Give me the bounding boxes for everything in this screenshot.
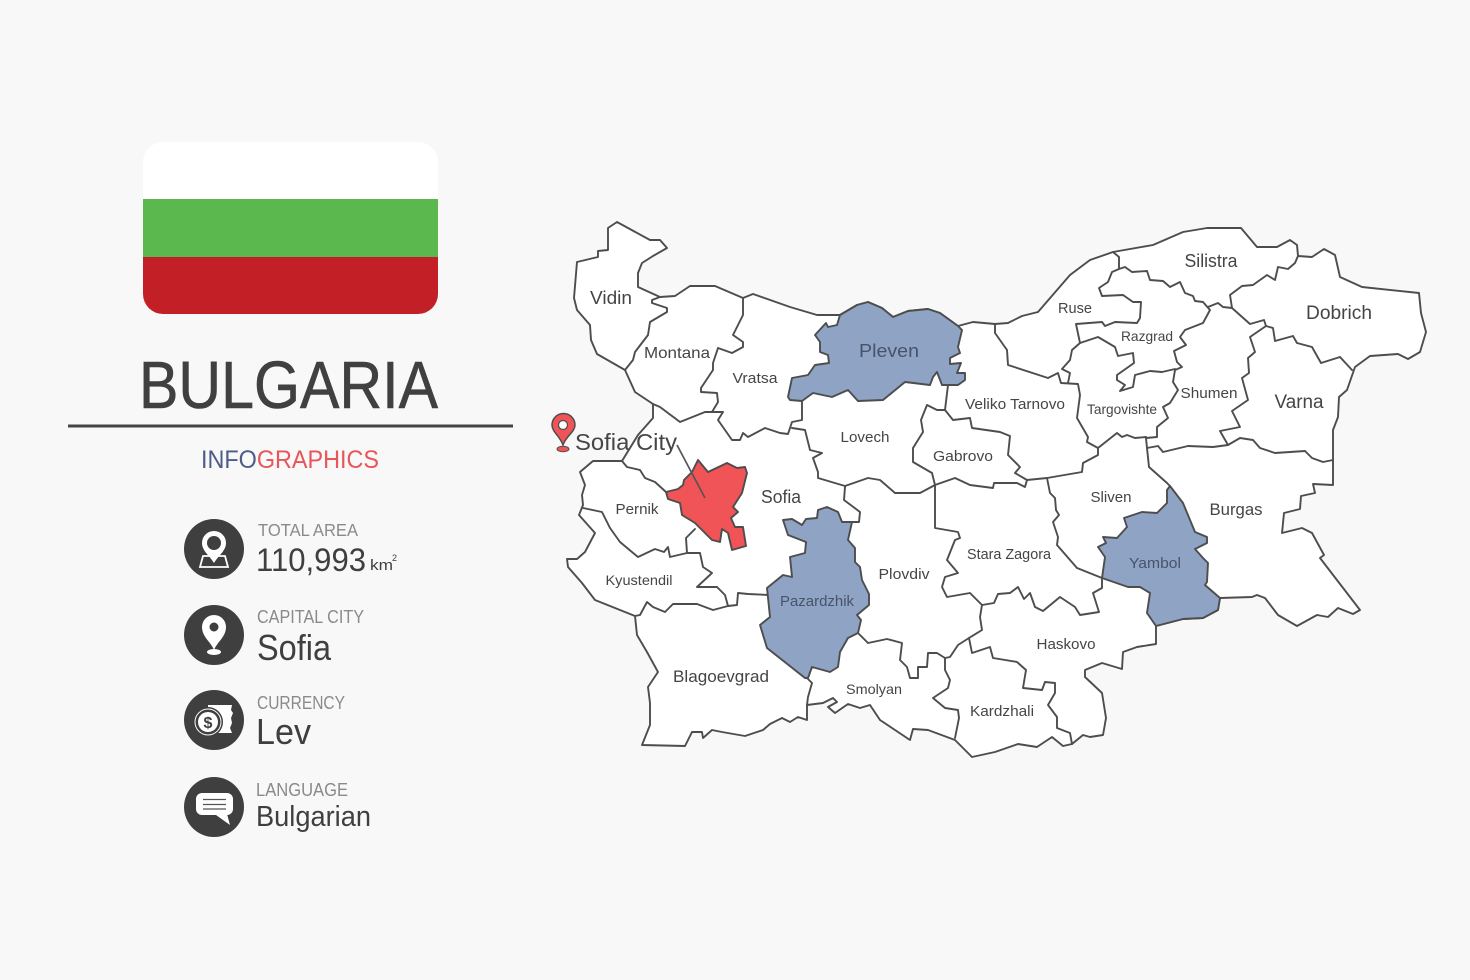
stat: total area: 110,993 — [256, 542, 366, 578]
stat: capital city — [184, 605, 364, 668]
icon: map pin on map — [184, 519, 244, 579]
stat: currency: CURRENCY — [257, 693, 345, 713]
subtitle: INFOGRAPHICS — [201, 446, 379, 474]
region: Yambol highlighted — [1098, 486, 1220, 626]
province labels: Pleven — [859, 341, 919, 361]
province labels: Burgas — [1210, 500, 1262, 519]
icon: red location pin — [552, 414, 575, 452]
stat: total area: 2 — [392, 553, 397, 563]
province labels: Vratsa — [732, 370, 778, 387]
province labels: Kardzhali — [970, 703, 1034, 720]
map of Bulgaria — [567, 222, 1426, 757]
province labels: Pazardzhik — [780, 593, 854, 610]
stat: language: LANGUAGE — [256, 780, 348, 800]
stat: language — [184, 777, 371, 837]
stat: currency — [184, 690, 345, 752]
stat: capital city: CAPITAL CITY — [257, 607, 364, 627]
province labels: Gabrovo — [933, 448, 993, 465]
callout line to Sofia City — [677, 445, 705, 498]
province labels: Razgrad — [1121, 328, 1173, 344]
stat: capital city: Sofia — [257, 627, 332, 668]
province labels: Varna — [1274, 392, 1324, 413]
province labels: Blagoevgrad — [673, 667, 769, 686]
region: Pleven highlighted — [788, 302, 965, 401]
icon: coin and banknotes: $ — [204, 715, 213, 732]
Sofia City label: Sofia City — [575, 429, 678, 455]
province labels: Stara Zagora — [967, 547, 1052, 563]
province labels: Targovishte — [1087, 401, 1157, 417]
stat: currency: Lev — [256, 711, 311, 752]
stat: total area: km — [370, 557, 393, 574]
province labels: Dobrich — [1306, 303, 1372, 324]
province labels: Smolyan — [846, 681, 902, 697]
icon: location pin — [184, 605, 244, 665]
stat: language: Bulgarian — [256, 801, 371, 833]
title: BULGARIA — [139, 348, 438, 423]
stat: total area — [184, 519, 397, 579]
province labels: Sliven — [1090, 489, 1132, 506]
region: Pazardzhik highlighted — [760, 507, 869, 678]
icon: speech bubble — [184, 777, 244, 837]
province boundaries — [583, 252, 1352, 744]
province labels: Sofia — [761, 487, 802, 507]
province labels: Kyustendil — [606, 572, 672, 588]
stat: total area: TOTAL AREA — [258, 520, 358, 540]
province labels: Pernik — [616, 501, 659, 518]
province labels: Vidin — [590, 287, 632, 308]
province labels: Yambol — [1129, 556, 1181, 572]
province labels — [590, 251, 1372, 720]
title underline — [68, 424, 513, 428]
region: Sofia City highlighted — [666, 460, 747, 550]
flag of Bulgaria — [143, 199, 438, 314]
province labels: Shumen — [1180, 385, 1238, 402]
icon: coin and banknotes — [184, 690, 244, 750]
map outline — [567, 222, 1426, 757]
province labels: Veliko Tarnovo — [965, 396, 1065, 413]
province labels: Haskovo — [1036, 636, 1096, 653]
province labels: Ruse — [1058, 300, 1092, 317]
province labels: Plovdiv — [878, 566, 930, 583]
province labels: Lovech — [840, 429, 890, 446]
province labels: Silistra — [1184, 251, 1238, 271]
province labels: Montana — [644, 345, 710, 362]
